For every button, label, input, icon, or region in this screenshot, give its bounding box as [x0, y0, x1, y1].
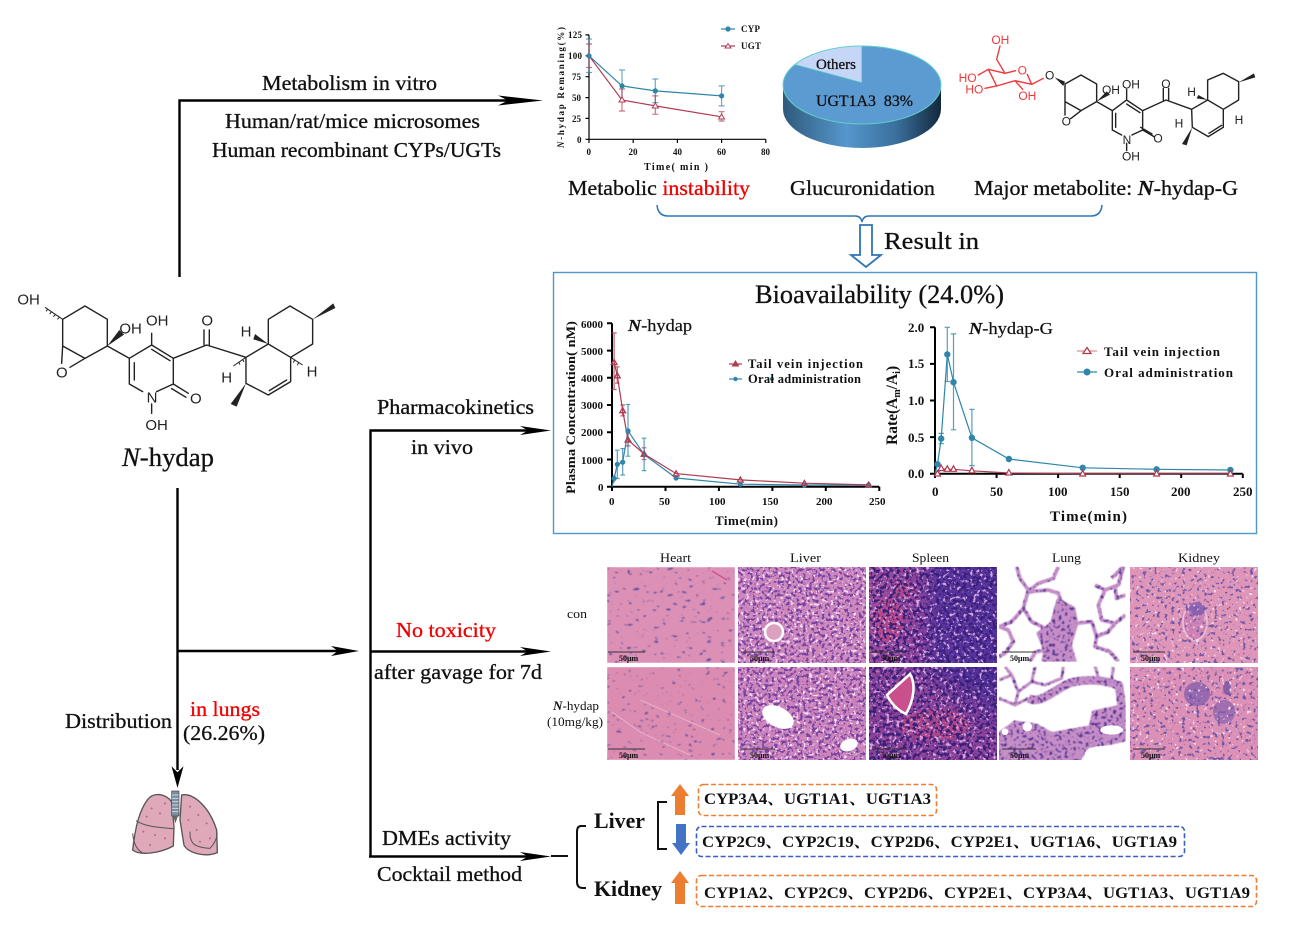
chart: metabolic stability: 40 [673, 147, 682, 157]
chart: metabolic stability: 100 [568, 51, 582, 61]
chart: N-hydap plasma concentration: 0 [598, 482, 604, 494]
chart: N-hydap plasma concentration: Plasma Concentration( nM) [563, 321, 578, 494]
molecule: N-hydap [17, 292, 335, 434]
micrographs: treated row [607, 665, 1258, 762]
molecule: N-hydap-G metabolite: OH [1102, 83, 1120, 97]
chart: N-hydap-G rate: m [892, 389, 903, 398]
chart: metabolic stability: 20 [628, 147, 638, 157]
molecule: N-hydap-G metabolite: H [1235, 113, 1243, 127]
molecule: N-hydap-G metabolite: HO [959, 71, 977, 85]
chart: N-hydap plasma concentration: Time(min) [715, 513, 778, 528]
chart: N-hydap-G rate: Rate(A [884, 398, 901, 445]
molecule: N-hydap: OH [146, 312, 168, 329]
molecule: N-hydap-G metabolite: OH [1122, 77, 1140, 91]
chart: N-hydap plasma concentration: 5000 [581, 346, 604, 358]
chart: metabolic stability: 0 [577, 135, 582, 145]
chart: N-hydap-G rate: /A [884, 373, 901, 390]
icon: orange up arrow [671, 784, 689, 815]
chart: N-hydap plasma concentration: 250 [869, 496, 886, 508]
text: distribution: Distribution [65, 709, 173, 733]
text: recombinant enzymes: Human recombinant CYPs/UGTs [212, 138, 501, 162]
chart: N-hydap-G rate: 50 [990, 484, 1003, 499]
panel: bioavailability [554, 272, 1256, 534]
molecule: N-hydap: OH [145, 417, 168, 434]
scale bars: 50μm [1141, 654, 1161, 663]
chart: metabolic stability: 80 [761, 147, 770, 157]
molecule: N-hydap-G metabolite: H [1175, 116, 1183, 130]
text: lung percentage: (26.26%) [183, 721, 265, 745]
text: in vivo: in vivo [411, 435, 473, 459]
chart: metabolic stability: 125 [568, 30, 582, 40]
scale bars: 50μm [881, 654, 901, 663]
text: in lungs: in lungs [190, 697, 260, 721]
molecule: N-hydap: O [190, 390, 202, 407]
caption: metabolic instability: Metabolic instability [568, 176, 751, 200]
chart: N-hydap-G rate: Time(min) [1050, 509, 1127, 525]
chart: metabolic stability: 0 [586, 147, 592, 157]
molecule: N-hydap: H [221, 370, 232, 387]
chart: 3D pie glucuronidation: Others [816, 57, 856, 73]
molecule: N-hydap-G metabolite: O [1018, 63, 1027, 77]
molecule: N-hydap: N [147, 390, 157, 407]
molecule: N-hydap-G metabolite: O [1045, 68, 1054, 82]
scale bars: 50μm [750, 751, 770, 760]
arrow: result in [851, 225, 881, 267]
text: after gavage: after gavage for 7d [374, 660, 543, 684]
heading: bioavailability: Bioavailability (24.0%) [755, 280, 1004, 309]
chart: metabolic stability: 25 [572, 114, 582, 124]
callout: kidney upregulated: CYP1A2、CYP2C9、CYP2D6、CYP2E1、CYP3A4、UGT1A3、UGT1A9 [704, 885, 1250, 902]
micrographs: control row [607, 567, 1258, 663]
row label: treated: (10mg/kg) [547, 714, 603, 729]
text: cocktail method: Cocktail method [377, 862, 523, 886]
arrow: branch to pharmacology [177, 646, 359, 656]
column labels: Spleen [912, 550, 950, 565]
molecule: N-hydap-G metabolite: OH [1122, 150, 1140, 164]
scale bars: 50μm [881, 751, 901, 760]
molecule: N-hydap: O [56, 365, 68, 382]
text: result in: Result in [884, 229, 979, 255]
text: liver: Liver [594, 808, 645, 833]
arrow: metabolism in vitro [180, 96, 543, 277]
icon: blue down arrow [672, 824, 690, 855]
chart: N-hydap-G rate: 200 [1171, 484, 1190, 499]
chart: metabolic stability: 60 [717, 147, 726, 157]
chart: N-hydap-G rate: 1.0 [908, 393, 924, 408]
chart: N-hydap plasma concentration: N-hydap [627, 316, 692, 335]
row label: treated [547, 698, 603, 729]
chart: 3D pie glucuronidation: UGT1A3 83% [816, 93, 913, 110]
chart: N-hydap plasma concentration: 150 [762, 496, 779, 508]
chart: N-hydap plasma concentration: 100 [709, 496, 726, 508]
chart: N-hydap plasma concentration: 50 [659, 496, 670, 508]
molecule: N-hydap-G metabolite: N [1123, 133, 1131, 147]
panel: histology [547, 550, 1258, 762]
scale bars: 50μm [1010, 751, 1030, 760]
bracket: liver up and down [658, 802, 667, 849]
scale bars: 50μm [1141, 751, 1161, 760]
chart: N-hydap-G rate: 0 [932, 484, 938, 499]
bracket: grouping captions [657, 205, 1102, 222]
chart: N-hydap-G rate [884, 319, 1252, 525]
scale bars: 50μm [619, 654, 639, 663]
molecule: N-hydap-G metabolite: O [1062, 114, 1071, 128]
scale bars: 50μm [1010, 654, 1030, 663]
text: microsomes: Human/rat/mice microsomes [225, 109, 480, 133]
chart: N-hydap-G rate: ) [884, 366, 901, 371]
chart: N-hydap plasma concentration: 6000 [581, 319, 604, 331]
scale bars [608, 652, 1165, 760]
icon: lungs [133, 791, 217, 855]
molecule: N-hydap-G metabolite: O [1153, 132, 1163, 146]
chart: N-hydap plasma concentration: 2000 [581, 427, 604, 439]
scale bars: 50μm [619, 751, 639, 760]
callout: liver upregulated [698, 784, 936, 816]
chart: N-hydap-G rate: N-hydap-G [968, 319, 1053, 338]
chart: N-hydap plasma concentration: Oral administration [748, 372, 861, 386]
chart: metabolic stability: 75 [572, 72, 582, 82]
molecule: N-hydap: H [307, 364, 317, 381]
molecule: N-hydap: H [241, 324, 251, 341]
row label: control: con [567, 606, 588, 621]
column labels: Kidney [1178, 550, 1221, 565]
chart: N-hydap-G rate: 0.5 [908, 430, 925, 445]
callout: liver downregulated: CYP2C9、CYP2C19、CYP2D6、CYP2E1、UGT1A6、UGT1A9 [702, 834, 1177, 851]
scale bars: 50μm [750, 654, 770, 663]
chart: N-hydap plasma concentration: 0 [609, 496, 615, 508]
heading: metabolism in vitro: Metabolism in vitro [262, 71, 437, 95]
column labels: Liver [790, 550, 822, 565]
chart: N-hydap plasma concentration: Tail vein injection [748, 357, 863, 371]
chart: N-hydap plasma concentration: 200 [816, 496, 833, 508]
chart: metabolic stability: Time( min ) [644, 162, 708, 173]
chart: metabolic stability: 50 [572, 93, 582, 103]
callout: liver upregulated: CYP3A4、UGT1A1、UGT1A3 [704, 791, 931, 808]
chart: N-hydap-G rate: 1.5 [908, 356, 925, 371]
callout: kidney upregulated [696, 876, 1256, 906]
chart: 3D pie glucuronidation [783, 46, 941, 148]
chart: N-hydap plasma concentration: 3000 [581, 400, 604, 412]
molecule: N-hydap-G metabolite: O [1161, 77, 1171, 91]
chart: N-hydap-G rate: 2.0 [908, 320, 924, 335]
arrow: pharmacokinetics [370, 426, 551, 856]
chart: N-hydap-G rate: i [892, 371, 903, 374]
chart: metabolic stability: CYP [741, 24, 760, 34]
molecule: N-hydap-G metabolite [959, 33, 1255, 164]
chart: N-hydap-G rate: Oral administration [1104, 365, 1234, 380]
label: N-hydap: N-hydap [121, 443, 214, 472]
text: pharmacokinetics: Pharmacokinetics [377, 395, 534, 419]
chart: N-hydap-G rate: 150 [1110, 484, 1130, 499]
chart: N-hydap-G rate: 0.0 [908, 466, 924, 481]
text: DMEs activity: DMEs activity [382, 826, 512, 850]
chart: N-hydap-G rate: Tail vein injection [1104, 344, 1221, 359]
column labels: Lung [1052, 550, 1082, 565]
chart: N-hydap-G rate: 100 [1048, 484, 1068, 499]
caption: major metabolite: Major metabolite: N-hydap-G [974, 176, 1238, 200]
column labels [660, 550, 1221, 565]
molecule: N-hydap-G metabolite: OH [991, 33, 1009, 47]
bracket: liver and kidney [551, 826, 586, 888]
chart: N-hydap plasma concentration: 4000 [581, 373, 604, 385]
icon: orange up arrow kidney [671, 871, 689, 904]
molecule: N-hydap: OH [119, 320, 142, 337]
callout: liver downregulated [696, 826, 1184, 856]
chart: N-hydap-G rate: 250 [1233, 484, 1252, 499]
arrow: DMEs activity [369, 852, 551, 861]
molecule: N-hydap-G metabolite: OH [1018, 89, 1036, 103]
molecule: N-hydap: OH [17, 292, 40, 309]
arrow: no toxicity [370, 647, 551, 656]
row label: treated: N-hydap [552, 698, 599, 713]
column labels: Heart [660, 550, 691, 565]
chart: metabolic stability [556, 24, 770, 173]
chart: metabolic stability: UGT [741, 41, 761, 51]
chart: N-hydap plasma concentration: 1000 [581, 455, 604, 467]
chart: metabolic stability: N-hydap Remaning(%) [556, 27, 566, 149]
text: kidney: Kidney [594, 876, 662, 901]
arrow: main trunk to lungs [172, 488, 182, 786]
chart: N-hydap plasma concentration [563, 316, 886, 528]
molecule: N-hydap-G metabolite: HO [965, 82, 983, 96]
molecule: N-hydap: O [201, 312, 213, 329]
text: no toxicity: No toxicity [396, 618, 497, 642]
molecule: N-hydap-G metabolite: H [1187, 85, 1196, 99]
caption: glucuronidation: Glucuronidation [790, 176, 936, 200]
